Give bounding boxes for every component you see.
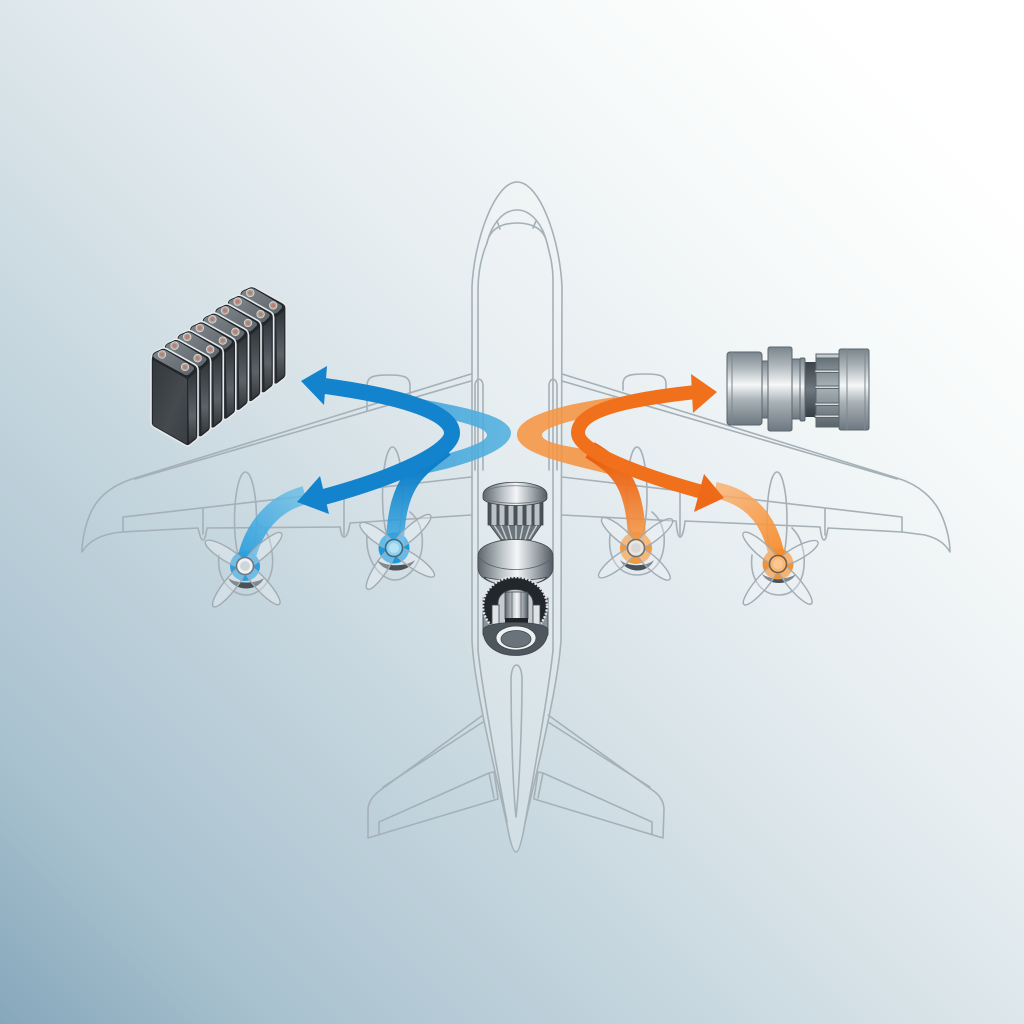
- bearing ring: [483, 577, 547, 635]
- orange arrows to generator and wing engine: [578, 374, 724, 512]
- propeller 4: [739, 528, 821, 609]
- orange down branch from generator: [590, 450, 637, 548]
- right tailplane: [534, 715, 664, 838]
- aircraft outline: [82, 182, 950, 852]
- battery pack: [151, 286, 286, 446]
- flow glows at hubs: [230, 532, 794, 581]
- orange fade to outer engine: [715, 490, 778, 562]
- propeller 1: [202, 528, 286, 611]
- side brackets: [492, 605, 499, 625]
- left tailplane: [368, 715, 498, 838]
- gear cap: [483, 482, 547, 506]
- inner bay: [498, 590, 533, 628]
- propeller 3: [595, 514, 676, 584]
- engine intake shading: [228, 560, 796, 588]
- orange power ribbon: [517, 397, 620, 475]
- blue power ribbon: [400, 396, 511, 474]
- generator: [727, 347, 869, 431]
- fuselage: [472, 182, 562, 852]
- central turbine gearbox: [478, 482, 553, 656]
- lower housing walls: [483, 598, 548, 635]
- right wing: [562, 374, 950, 552]
- propeller 2: [356, 510, 438, 593]
- left wing: [82, 374, 471, 552]
- engine mount left: [367, 375, 410, 411]
- bottom cup: [483, 622, 548, 656]
- blue arrows to battery and wing engine: [297, 366, 452, 514]
- main ring: [478, 540, 553, 586]
- gear columns: [488, 500, 543, 525]
- blue fade to outer engine: [245, 495, 305, 566]
- blue down branch from engine: [395, 448, 445, 548]
- engine mount right: [623, 374, 666, 396]
- nacelles: [219, 447, 804, 595]
- bevel teeth: [489, 524, 542, 540]
- inner gear: [505, 592, 528, 619]
